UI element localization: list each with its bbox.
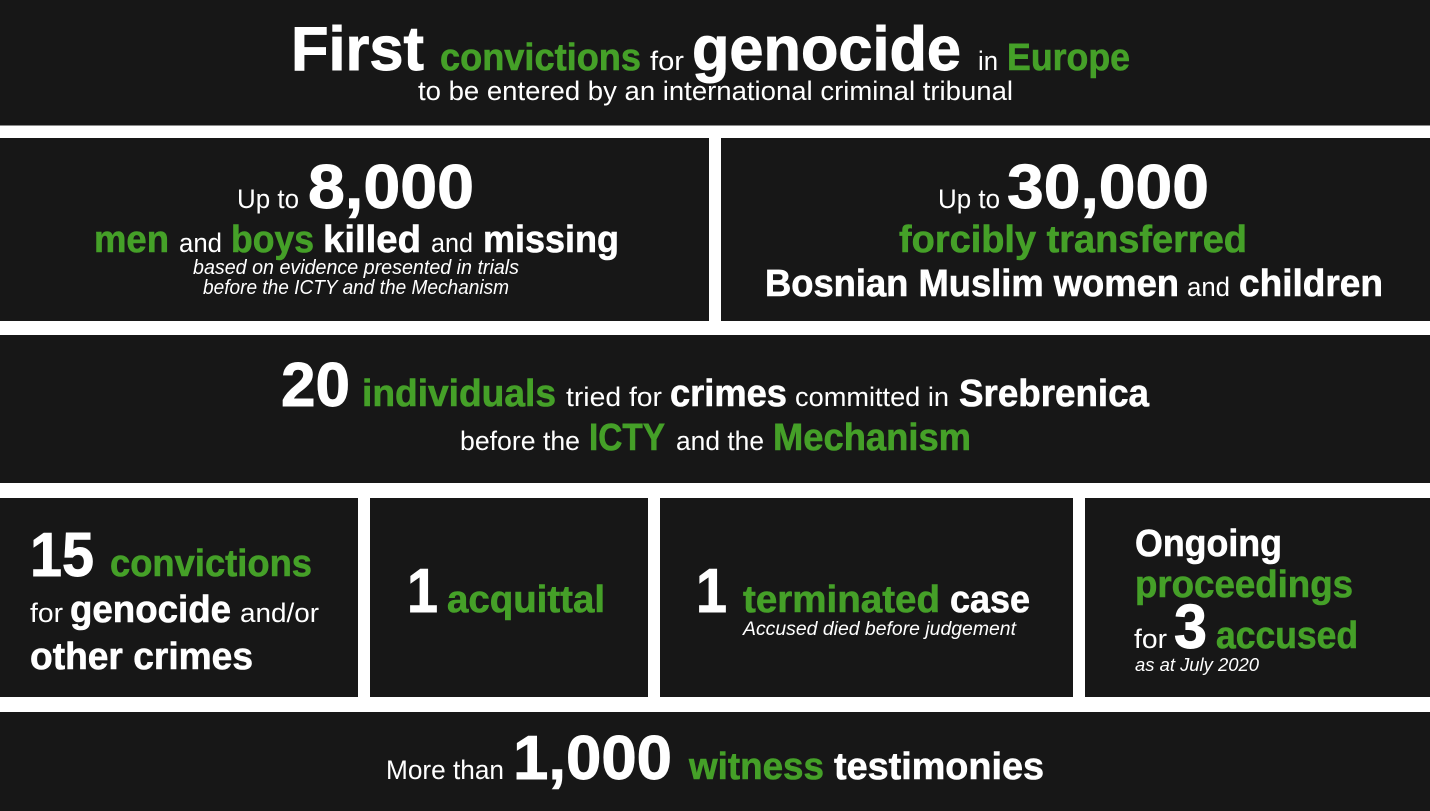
- note: accused died: Accused died before judgement: [742, 619, 1017, 640]
- subheading: to be entered by an international criminal tribunal: [418, 76, 1013, 106]
- text: forcibly transferred: forcibly transferred: [899, 219, 1247, 261]
- statistic: up to 30,000: Up to: [938, 184, 1000, 214]
- text: witness testimonies: witness: [688, 746, 824, 788]
- line two: before the ICTY and the Mechanism: Mechanism: [773, 417, 971, 459]
- text: Ongoing: Ongoing: [1135, 523, 1282, 565]
- text: Bosnian Muslim women and children: and: [1187, 272, 1230, 302]
- line two: before the ICTY and the Mechanism: before the: [460, 426, 580, 456]
- text: Bosnian Muslim women and children: children: [1239, 263, 1383, 305]
- text: terminated case: [743, 579, 1030, 621]
- statistic: up to 30,000: 30,000: [1007, 153, 1209, 222]
- statistic: up to 8,000: Up to: [237, 184, 299, 214]
- line one: 20 individuals tried for crimes: committed in: [795, 382, 949, 412]
- text: men and boys killed and missing: boys: [231, 219, 314, 261]
- heading: First: [291, 15, 424, 84]
- note: evidence: [193, 257, 519, 299]
- line one: 20 individuals tried for crimes: [281, 351, 1150, 420]
- statistic: for 3 accused: [1134, 593, 1358, 662]
- note: evidence: before the ICTY and the Mechanism: [203, 277, 509, 299]
- statistic: 15 convictions: convictions: [110, 543, 312, 585]
- line one: 20 individuals tried for crimes: Srebrenica: [959, 373, 1150, 415]
- statistic: 15 convictions: [30, 521, 312, 590]
- panel: 1 acquittal: [370, 498, 648, 697]
- line one: 20 individuals tried for crimes: individuals: [362, 373, 556, 415]
- statistic: for 3 accused: 3: [1174, 593, 1207, 662]
- statistic: for 3 accused: accused: [1216, 615, 1358, 657]
- text: men and boys killed and missing: and: [431, 228, 473, 258]
- line one: 20 individuals tried for crimes: 20: [281, 351, 350, 420]
- text: proceedings: proceedings: [1135, 564, 1353, 606]
- text: more than: More than: [386, 755, 504, 785]
- statistic: 1: 1: [407, 557, 438, 626]
- panel: witness testimonies: [0, 712, 1430, 811]
- line one: 20 individuals tried for crimes: tried for: [566, 382, 662, 412]
- heading: convictions: [440, 37, 641, 79]
- text: men and boys killed and missing: men: [94, 219, 169, 261]
- heading: Europe: [1007, 37, 1130, 79]
- statistic: up to 8,000: 8,000: [308, 153, 474, 222]
- text: other crimes: other crimes: [30, 636, 253, 678]
- panel: 30,000 forcibly transferred: [721, 138, 1430, 321]
- statistic: for 3 accused: for: [1134, 624, 1167, 654]
- heading: [291, 15, 1130, 84]
- statistic: 15 convictions: 15: [30, 521, 94, 590]
- panel: 15 convictions: [0, 498, 358, 697]
- line two: before the ICTY and the Mechanism: ICTY: [589, 417, 665, 459]
- text: men and boys killed and missing: and: [179, 228, 222, 258]
- line one: 20 individuals tried for crimes: crimes: [670, 373, 787, 415]
- heading: for: [650, 46, 684, 76]
- text: witness testimonies: testimonies: [834, 746, 1044, 788]
- text: men and boys killed and missing: missing: [483, 219, 619, 261]
- heading: genocide: [692, 15, 961, 84]
- text: for genocide and/or: and/or: [240, 598, 319, 628]
- note: evidence: based on evidence presented in trials: [193, 257, 519, 279]
- statistic: up to 30,000: [938, 153, 1209, 222]
- text: Bosnian Muslim women and children: Bosnian Muslim women: [765, 263, 1179, 305]
- note: as at July 2020: as at July 2020: [1135, 655, 1259, 675]
- text: terminated case: case: [950, 579, 1030, 621]
- statistic: 1: 1: [696, 557, 727, 626]
- statistic: up to 8,000: [237, 153, 474, 222]
- panel: 1 terminated case: [660, 498, 1073, 697]
- text: for genocide and/or: genocide: [70, 589, 231, 631]
- text: men and boys killed and missing: [94, 219, 619, 261]
- text: for genocide and/or: for: [30, 598, 63, 628]
- text: men and boys killed and missing: killed: [323, 219, 421, 261]
- panel: 20 individuals tried: [0, 335, 1430, 483]
- heading: in: [978, 46, 998, 76]
- text: terminated case: terminated: [743, 579, 940, 621]
- panel: title: [0, 0, 1430, 126]
- line two: before the ICTY and the Mechanism: and the: [676, 426, 764, 456]
- line two: before the ICTY and the Mechanism: [460, 417, 971, 459]
- text: witness testimonies: [688, 746, 1044, 788]
- panel: ongoing proceedings: [1085, 498, 1430, 697]
- statistic: 1,000: 1,000: [513, 724, 672, 793]
- text: for genocide and/or: [30, 589, 319, 631]
- text: acquittal: acquittal: [447, 579, 605, 621]
- panel: 8,000 killed and missing: [0, 138, 709, 321]
